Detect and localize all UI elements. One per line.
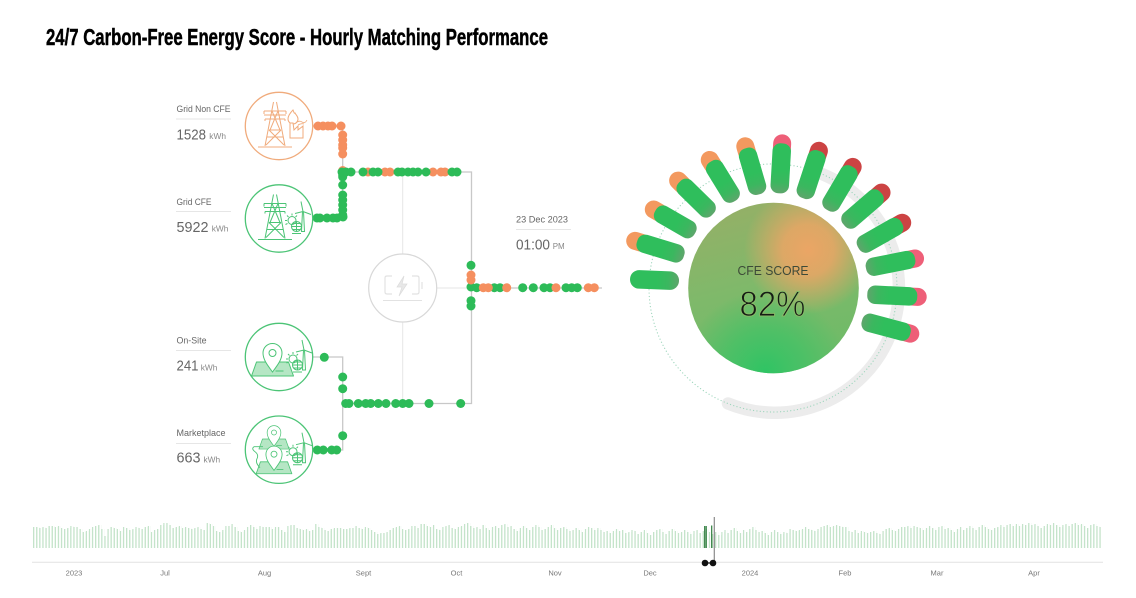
timestamp: 01:00 [516, 237, 550, 253]
axis line [32, 561, 1103, 563]
axis labels: Mar [931, 568, 944, 578]
energy dots: grid CFE [312, 170, 348, 222]
label: grid non CFE: 1528 [176, 128, 206, 144]
label: grid CFE: 5922 [176, 220, 208, 236]
label: grid CFE: kWh [212, 224, 229, 234]
panel: timeline [32, 517, 1103, 578]
icon: battery hub [369, 254, 437, 322]
icon: marketplace [245, 416, 313, 483]
label: grid non CFE: kWh [209, 131, 226, 141]
axis labels: Feb [839, 568, 851, 578]
timestamp: 23 Dec 2023 [516, 215, 568, 225]
selected bars [705, 526, 712, 548]
axis labels: Apr [1028, 568, 1040, 578]
timestamp: PM [553, 241, 565, 251]
hourly pills [624, 134, 927, 345]
label: marketplace: Marketplace [176, 428, 226, 438]
label: marketplace: kWh [204, 454, 220, 464]
panel: energy flow diagram [176, 92, 602, 483]
energy dots: on-site and marketplace [313, 353, 465, 454]
axis labels: Nov [548, 568, 562, 578]
dotted ring [649, 164, 897, 412]
score label: CFE SCORE [738, 263, 809, 278]
gauge track [728, 174, 899, 413]
icon: grid non CFE [245, 92, 313, 160]
panel: CFE score gauge [624, 134, 927, 413]
label: marketplace: 663 [176, 451, 200, 467]
label: on-site: 241 [176, 359, 198, 375]
label: grid non CFE: Grid Non CFE [176, 104, 230, 114]
connector lines [313, 126, 602, 450]
label: on-site: kWh [201, 362, 218, 372]
axis labels: Oct [451, 568, 463, 578]
label: grid CFE: Grid CFE [176, 197, 212, 207]
axis labels [66, 568, 1040, 578]
label: grid non CFE [176, 104, 231, 144]
time marker [702, 517, 716, 566]
axis labels: Aug [258, 568, 271, 578]
hourly bars [33, 523, 1102, 548]
icon: on-site [245, 323, 313, 391]
score value: 82% [740, 285, 806, 324]
axis labels: Jul [160, 568, 170, 578]
label: grid CFE [176, 197, 231, 236]
axis labels: 2023 [66, 568, 82, 578]
title: 24/7 Carbon-Free Energy Score - Hourly Matching Performance [46, 24, 548, 50]
axis labels: Sept [356, 568, 372, 578]
axis labels: Dec [643, 568, 657, 578]
timestamp [516, 215, 571, 253]
energy dots: output line [466, 261, 599, 310]
label: on-site [176, 336, 231, 375]
score disc [688, 203, 859, 373]
icon: grid CFE [245, 185, 313, 252]
axis labels: 2024 [742, 568, 758, 578]
energy dots: grid mixed line [338, 168, 462, 176]
label: marketplace [176, 428, 231, 467]
label: on-site: On-Site [176, 336, 206, 346]
energy dots: grid non CFE [314, 122, 347, 175]
